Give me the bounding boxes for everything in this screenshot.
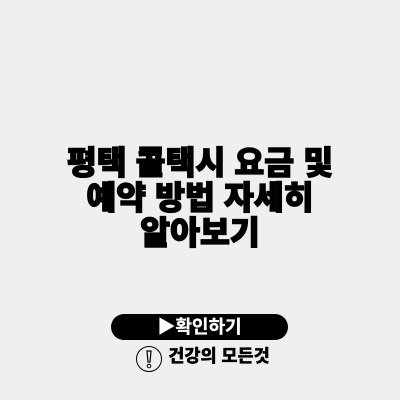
title: 알아보기 xyxy=(140,215,260,251)
title xyxy=(67,145,333,251)
button: confirm xyxy=(111,314,288,340)
icon: exclamation circle xyxy=(136,346,162,372)
title: 예약 방법 자세히 xyxy=(86,180,314,216)
brand name: 건강의 모든것 xyxy=(168,346,270,366)
button: confirm: ▶확인하기 xyxy=(157,317,242,337)
title: 평택 콜택시 요금 및 xyxy=(67,145,333,181)
